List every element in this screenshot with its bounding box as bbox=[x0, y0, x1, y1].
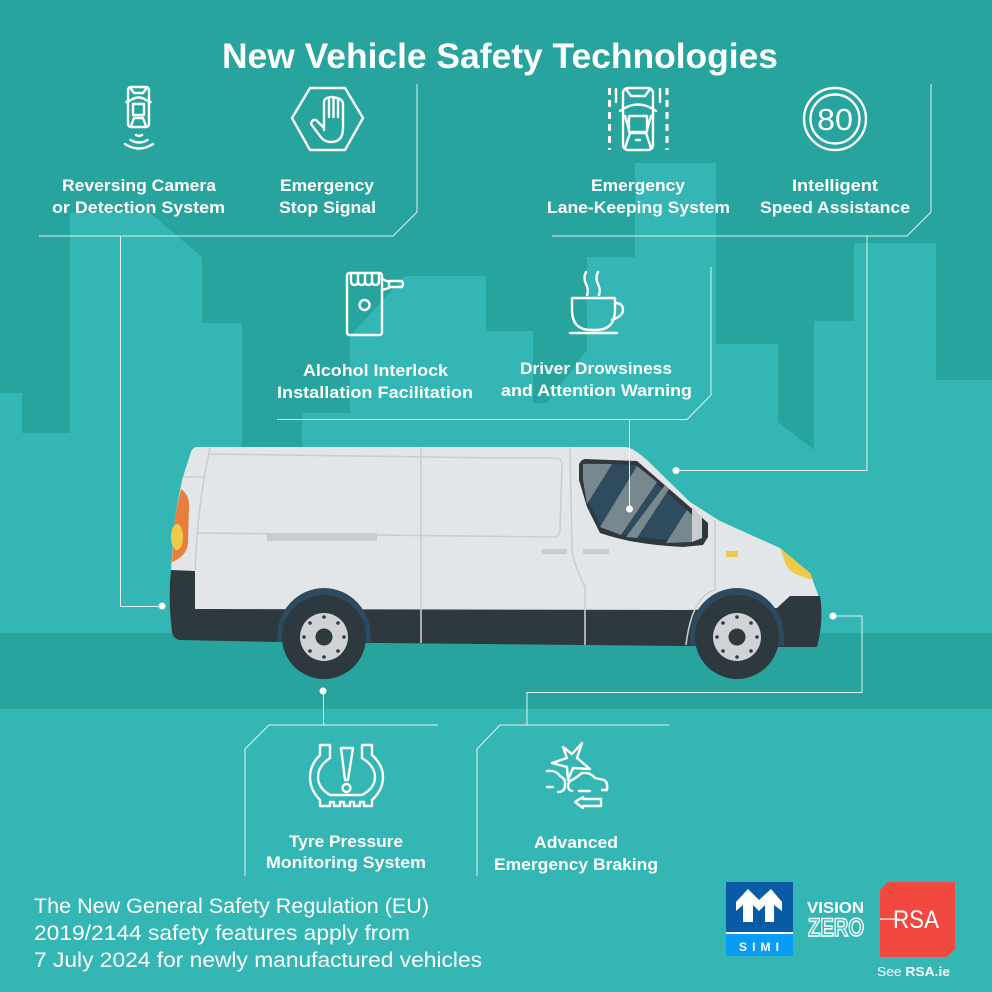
footer note: The New General Safety Regulation (EU) bbox=[34, 895, 429, 918]
icon: 80 speed sign bbox=[804, 88, 866, 150]
van illustration bbox=[170, 447, 821, 679]
bracket and connector: middle bbox=[277, 267, 711, 509]
bracket and connector: braking bbox=[477, 616, 862, 876]
logo: Vision Zero: VISION bbox=[807, 900, 864, 917]
footer note: 7 July 2024 for newly manufactured vehicles bbox=[34, 949, 482, 972]
bracket and connector: tyre bbox=[245, 691, 438, 876]
label: speed assistance: Speed Assistance bbox=[760, 198, 910, 217]
logo: RSA: RSA bbox=[893, 906, 939, 934]
label: reversing camera: or Detection System bbox=[52, 198, 225, 217]
logo: SIMI: SIMI bbox=[739, 940, 779, 954]
label: reversing camera bbox=[52, 176, 225, 217]
footer note bbox=[34, 895, 482, 972]
footer note: 2019/2144 safety features apply from bbox=[34, 922, 410, 945]
connector lines over van and dots bbox=[158, 447, 836, 694]
title: New Vehicle Safety Technologies bbox=[222, 37, 778, 76]
icon: alcohol interlock bbox=[347, 273, 403, 335]
van window bbox=[579, 459, 708, 547]
label: emergency stop signal bbox=[279, 176, 376, 217]
van body bbox=[171, 447, 820, 625]
label: driver drowsiness: Driver Drowsiness bbox=[520, 359, 672, 378]
label: lane keeping: Lane-Keeping System bbox=[547, 198, 730, 217]
logo: SIMI bbox=[726, 882, 793, 956]
bracket and connector: top left bbox=[39, 84, 417, 606]
label: lane keeping: Emergency bbox=[591, 176, 686, 195]
label: emergency braking: Advanced bbox=[534, 833, 618, 852]
panel: emergency braking bbox=[477, 616, 862, 876]
label: driver drowsiness bbox=[501, 359, 692, 400]
panel: middle features bbox=[277, 267, 711, 509]
icon: reversing camera bbox=[125, 87, 153, 148]
panel: top right features bbox=[547, 84, 931, 470]
panel: tyre pressure bbox=[245, 691, 438, 876]
van side indicator bbox=[726, 551, 738, 557]
van headlight bbox=[781, 549, 813, 580]
logo: RSA bbox=[880, 882, 955, 957]
van lower trim bbox=[170, 570, 821, 647]
icon: lane keeping bbox=[610, 88, 667, 150]
label: tyre pressure: Tyre Pressure bbox=[289, 832, 403, 851]
label: alcohol interlock: Alcohol Interlock bbox=[303, 361, 449, 380]
panel: top left features bbox=[39, 84, 417, 606]
label: driver drowsiness: and Attention Warning bbox=[501, 381, 692, 400]
rear wheel bbox=[277, 588, 371, 679]
label: emergency braking bbox=[494, 833, 658, 874]
label: emergency stop signal: Emergency bbox=[280, 176, 375, 195]
van tail light bbox=[171, 489, 189, 562]
background: foreground ground bbox=[0, 709, 992, 992]
icon: emergency stop hand bbox=[292, 88, 363, 150]
label: emergency braking: Emergency Braking bbox=[494, 855, 658, 874]
label: tyre pressure: Monitoring System bbox=[266, 853, 426, 872]
background: road band bbox=[0, 633, 992, 709]
bracket and connector: top right bbox=[552, 84, 931, 470]
label: tyre pressure bbox=[266, 832, 426, 872]
logo: Vision Zero bbox=[807, 900, 864, 942]
website link text: See RSA.ie bbox=[877, 964, 950, 979]
label: emergency stop signal: Stop Signal bbox=[279, 198, 376, 217]
logo: Vision Zero: ZERO bbox=[808, 914, 864, 942]
icon: 80 speed sign: 80 bbox=[817, 102, 853, 137]
background: city skyline bbox=[0, 163, 992, 640]
label: lane keeping bbox=[547, 176, 730, 217]
label: alcohol interlock: Installation Facilitation bbox=[277, 383, 473, 402]
label: speed assistance: Intelligent bbox=[792, 176, 878, 195]
front wheel bbox=[690, 588, 784, 679]
label: speed assistance bbox=[760, 176, 910, 217]
icon: coffee cup bbox=[570, 272, 623, 333]
icon: tyre pressure warning bbox=[310, 745, 383, 806]
label: reversing camera: Reversing Camera bbox=[62, 176, 217, 195]
van panel lines bbox=[183, 447, 715, 645]
icon: advanced emergency braking bbox=[547, 743, 607, 808]
label: alcohol interlock bbox=[277, 361, 473, 402]
